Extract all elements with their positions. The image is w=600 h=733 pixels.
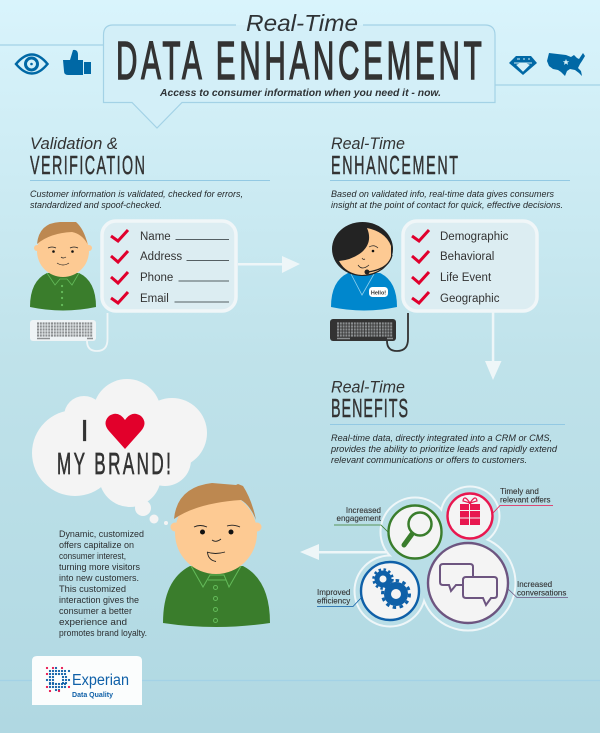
icon: heart — [106, 414, 144, 449]
title: Data Enhancement: DATA ENHANCEMENT — [116, 32, 482, 91]
paragraph: promotes brand loyalty. — [59, 628, 147, 638]
description: Based on validated info, real-time data gives consumers — [331, 189, 554, 199]
heading: Enhancement: ENHANCEMENT — [331, 152, 458, 180]
panel: validation and verification — [30, 134, 270, 351]
panel: real-time enhancement — [330, 134, 570, 351]
benefits cluster — [317, 486, 568, 632]
description: relevant communications or offers to customers. — [331, 455, 527, 465]
cloud text: I: I — [80, 413, 89, 448]
logo wordmark: Experian — [72, 672, 129, 689]
label: increased engagement: engagement — [337, 514, 382, 523]
cloud text: my brand: MY BRAND! — [57, 447, 171, 481]
title: Real-Time: Real-Time — [246, 10, 358, 36]
circle: conversations — [428, 543, 508, 623]
field labels: Email — [140, 293, 169, 305]
label: improved efficiency — [317, 588, 361, 606]
cable — [87, 313, 108, 351]
description: standardized and spoof-checked. — [30, 200, 162, 210]
circle: efficiency — [361, 562, 419, 620]
field labels: Phone — [140, 272, 173, 284]
paragraph: This customized — [59, 584, 126, 594]
icon: eye — [16, 54, 48, 74]
heading: Benefits: BENEFITS — [331, 395, 408, 423]
heading: Validation &: Validation & — [30, 134, 118, 153]
heading: Verification: VERIFICATION — [30, 152, 145, 180]
field labels: Name — [140, 231, 171, 243]
label: increased conversations: Increased — [517, 580, 552, 589]
character: happy customer — [163, 483, 270, 627]
label: timely offers: Timely and — [500, 487, 539, 496]
halo fill — [356, 488, 514, 630]
arrow: right — [238, 256, 300, 273]
description: insight at the point of contact for quick, effective decisions. — [331, 200, 563, 210]
title box — [104, 10, 495, 128]
description: provides the ability to prioritize leads and rapidly extend — [330, 444, 558, 454]
circle: engagement — [388, 506, 442, 558]
icon: USA map — [547, 53, 585, 76]
checkmarks — [111, 230, 128, 303]
paragraph: consumer interest, — [59, 551, 126, 561]
label: increased engagement — [334, 506, 388, 532]
paragraph: interaction gives the — [59, 595, 139, 605]
data labels: Life Event — [440, 272, 492, 284]
icon: thumbs up — [63, 50, 91, 75]
icon: diamond — [509, 56, 537, 75]
cable — [387, 313, 408, 351]
circle: offers — [448, 494, 492, 538]
character: man — [30, 222, 96, 310]
label: increased engagement: Increased — [346, 506, 381, 515]
data labels: Geographic — [440, 293, 500, 305]
label: timely offers — [493, 487, 553, 513]
logo: Experian — [32, 656, 142, 705]
paragraph: consumer a better — [59, 606, 132, 616]
description: Real-time data, directly integrated into a CRM or CMS, — [331, 433, 552, 443]
paragraph: into new customers. — [59, 573, 139, 583]
halo outline — [354, 486, 516, 632]
paragraph: offers capitalize on — [59, 540, 134, 550]
arrow: down — [485, 311, 502, 380]
heading: Real-Time: Real-Time — [331, 134, 405, 153]
paragraph: turning more visitors — [59, 562, 140, 572]
label: improved efficiency: Improved — [317, 588, 350, 597]
description: Customer information is validated, checked for errors, — [30, 189, 243, 199]
logo subtext: Data Quality — [72, 692, 113, 699]
logo mark — [47, 668, 70, 691]
field labels: Address — [140, 251, 182, 263]
thought cloud — [32, 379, 207, 525]
character: agent — [331, 222, 397, 310]
label: improved efficiency: efficiency — [317, 596, 350, 606]
checkmarks — [412, 230, 429, 303]
arrow: left — [300, 544, 390, 560]
subtitle: Access to consumer information when you need it - now. — [159, 88, 441, 99]
label: increased conversations — [508, 580, 568, 598]
paragraph: Dynamic, customized — [59, 529, 144, 539]
paragraph: experience and — [59, 617, 127, 627]
label: increased conversations: conversations — [517, 588, 566, 598]
keyboard: light — [30, 320, 96, 341]
checklist card — [403, 221, 537, 311]
label: timely offers: relevant offers — [500, 496, 551, 504]
panel: real-time benefits — [330, 378, 565, 465]
data labels: Demographic — [440, 231, 509, 243]
checklist card — [102, 221, 236, 311]
heading: Real-Time: Real-Time — [331, 378, 405, 396]
name badge: Hello! — [371, 290, 386, 296]
data labels: Behavioral — [440, 251, 494, 263]
keyboard: dark — [330, 319, 396, 341]
